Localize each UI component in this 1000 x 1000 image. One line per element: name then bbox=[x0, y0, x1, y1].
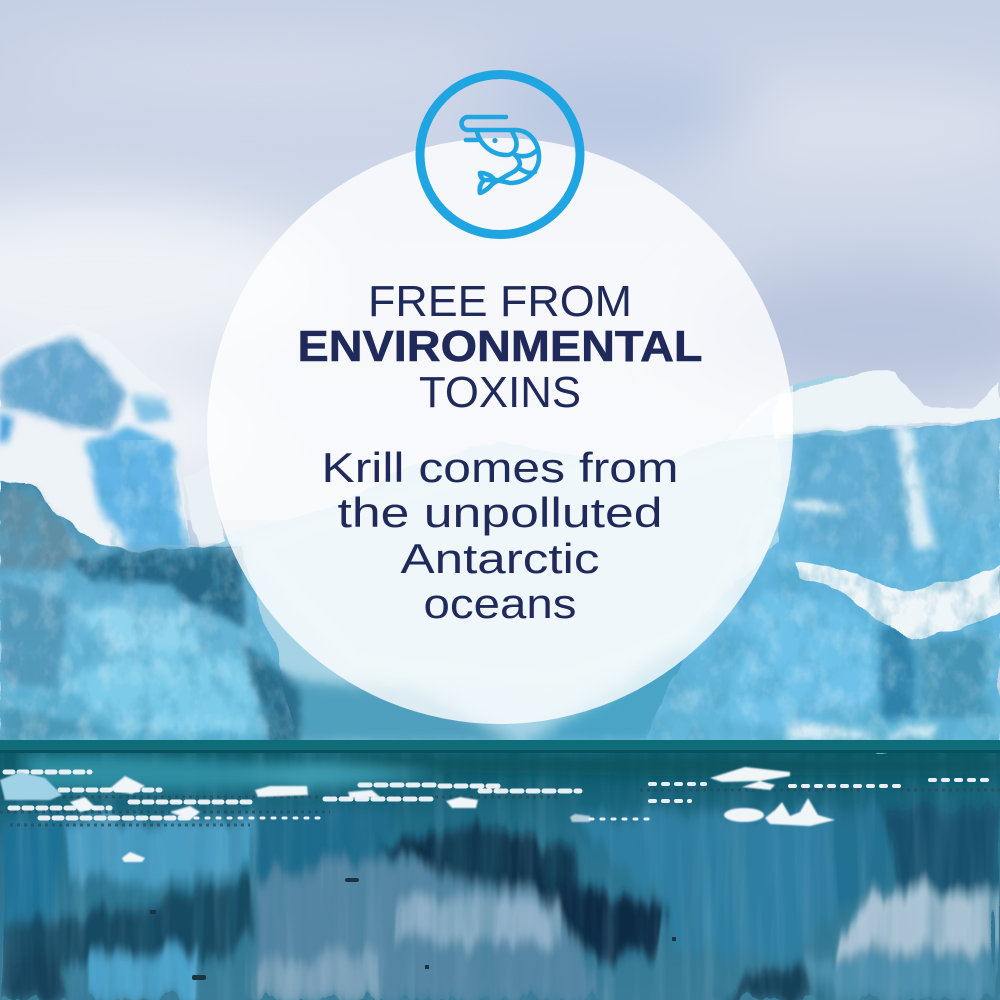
iceberg: dark waterline band bbox=[0, 740, 1000, 753]
translucent white circle panel bbox=[207, 138, 793, 724]
body text: Krill comes from bbox=[322, 444, 678, 491]
heading: ENVIRONMENTAL bbox=[298, 322, 702, 371]
iceberg: left lower block bbox=[0, 480, 300, 750]
body text bbox=[322, 444, 678, 627]
iceberg: left peak bbox=[0, 324, 240, 560]
faint iceberg detail seen through circle bbox=[240, 385, 793, 690]
iceberg: centre mass behind the circle bbox=[210, 372, 900, 750]
background: reflective water bbox=[0, 750, 1000, 1000]
body text: oceans bbox=[424, 580, 576, 627]
body text: the unpolluted bbox=[338, 489, 662, 536]
icon: shrimp in blue ring bbox=[420, 74, 580, 234]
heading bbox=[298, 277, 702, 417]
heading: FREE FROM bbox=[368, 277, 632, 326]
iceberg: surface texture bbox=[0, 320, 1000, 750]
body text: Antarctic bbox=[400, 535, 600, 582]
floating ice floes bbox=[0, 767, 1000, 980]
iceberg: right ice wall bbox=[640, 372, 1000, 750]
background: overcast sky bbox=[0, 0, 1000, 520]
heading: TOXINS bbox=[419, 368, 581, 417]
